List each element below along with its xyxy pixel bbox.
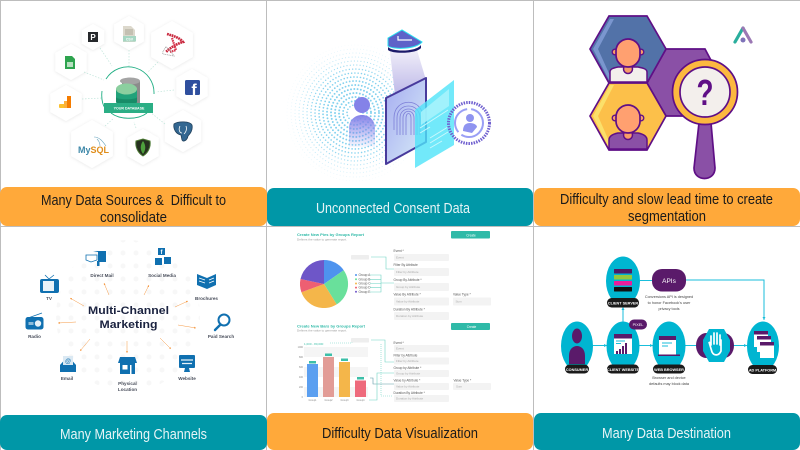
note: conversions API: to honor Facebook's user	[648, 301, 691, 305]
pie legend: Group E	[358, 290, 370, 294]
create button	[451, 231, 490, 238]
heading: multi-channel marketing: Marketing	[100, 319, 158, 331]
icon: Pipedrive	[88, 32, 98, 42]
pie form fields: Sum	[456, 300, 462, 304]
panel: many data sources	[0, 16, 267, 226]
rotating arrows around database	[102, 67, 154, 118]
icon: physical location	[118, 357, 137, 392]
icon: SQL Server	[163, 34, 183, 56]
caption bar: Unconnected Consent Data	[316, 200, 471, 217]
caption bar: segmentation	[628, 208, 706, 225]
icon: MySQL	[78, 137, 110, 155]
caption bar	[267, 413, 533, 450]
pie legend: Group D	[358, 286, 371, 290]
bar form fields: Group by Attribute	[396, 372, 421, 376]
pie report heading: Defines the value to generate report.	[297, 238, 347, 242]
caption bar: Many Data Destination	[602, 425, 731, 442]
bar form fields: Group by Attribute *	[394, 366, 422, 370]
icon: magnifying glass with question mark	[672, 60, 738, 178]
pie form fields: Group by Attribute	[396, 285, 421, 289]
pie report heading: Create New Pies by Groups Report	[297, 233, 365, 237]
orange arrows	[58, 283, 196, 353]
bar form fields: Event	[396, 346, 404, 350]
label: your database	[104, 103, 153, 113]
note: conversions API	[645, 295, 693, 311]
icon: website: Website	[178, 376, 196, 381]
icon: Google Analytics	[59, 96, 71, 108]
pie form fields: Value by Attribute	[396, 300, 420, 304]
pie chart	[300, 260, 348, 308]
create button: Create	[466, 234, 476, 238]
tablet with fingerprint	[386, 78, 426, 164]
pie form fields: Duration by Attribute	[396, 314, 424, 318]
node: web browser	[652, 322, 686, 374]
icon: paid search	[208, 314, 234, 339]
node: client server	[606, 256, 640, 308]
panel: many marketing channels	[0, 240, 267, 450]
bar form fields	[394, 341, 491, 402]
node: client server: CLIENT SERVER	[608, 302, 638, 306]
icon: MongoDB	[136, 139, 150, 156]
node: APIs	[652, 269, 686, 292]
bar chart: Group4	[357, 399, 365, 402]
pie form fields	[394, 249, 491, 320]
caption bar: Difficulty and slow lead time to create	[560, 191, 773, 208]
bar form fields: Event *	[394, 341, 405, 345]
icon: CSV file	[123, 26, 136, 42]
flow arrows	[593, 280, 764, 346]
icon: brochures: Brochures	[195, 296, 218, 301]
logo mark	[735, 28, 751, 42]
bar form fields: Value by Attribute	[396, 384, 420, 388]
bar form fields: Sum	[456, 384, 463, 388]
pie form fields: Duration By Attribute *	[394, 308, 426, 312]
icon: physical location: Location	[118, 387, 137, 392]
label: pixel	[629, 320, 647, 330]
dotted connectors	[82, 48, 174, 128]
panel: unconnected consent data	[267, 30, 533, 226]
icon: CSV file: CSV	[126, 38, 134, 42]
heading: multi-channel marketing: Multi-Channel	[88, 305, 169, 317]
bar chart	[298, 342, 368, 402]
bar report heading	[297, 324, 366, 332]
pie type select	[351, 255, 369, 260]
note: browser defaults: Browser and device	[652, 376, 686, 380]
pie legend: Group B	[358, 277, 370, 281]
icon: shield scanner	[388, 30, 422, 53]
heading: multi-channel marketing	[88, 305, 169, 331]
caption bar	[534, 188, 800, 226]
scanner beam	[390, 50, 426, 95]
hexagon: yellow person	[590, 83, 666, 150]
illustration: data source hexagons	[50, 16, 208, 168]
note: browser defaults: defaults may block data	[649, 382, 690, 386]
dotted background	[56, 240, 200, 392]
icon: Pipedrive: P	[90, 33, 96, 42]
pie report heading	[297, 233, 365, 242]
icon: email: Email	[61, 376, 73, 381]
pie form fields: Filter by Attribute	[396, 270, 419, 274]
bar chart: 1,000 - 80,000	[304, 342, 324, 346]
label: pixel: PIXEL	[633, 323, 643, 327]
node: consumer: CONSUMER	[566, 368, 588, 372]
icon: database cylinder	[116, 78, 140, 104]
node: consumer	[561, 322, 593, 374]
node: ad platform: AD PLATFORM	[749, 368, 776, 372]
icon: PostgreSQL	[174, 122, 192, 141]
bar chart: Group3	[341, 399, 349, 402]
pie legend: Group C	[358, 282, 371, 286]
halftone dot field	[287, 45, 423, 181]
caption bar	[0, 415, 267, 450]
panel: many data destination	[534, 256, 800, 450]
icon: brochures	[195, 274, 218, 301]
pie connectors	[370, 257, 394, 292]
icon: blocking hand	[696, 329, 734, 362]
bar form fields: Filter by Attribute	[394, 354, 418, 358]
icon: Facebook	[185, 80, 200, 99]
caption bar: Many Marketing Channels	[60, 426, 207, 443]
pie form fields: Group By Attribute *	[394, 278, 422, 282]
bar form fields: Value by Attribute *	[394, 378, 421, 382]
icon: website	[178, 355, 196, 381]
panel: data visualization	[267, 231, 533, 450]
pie form fields: Event	[396, 256, 404, 260]
icon: MySQL: MySQL	[78, 145, 110, 155]
caption bar: consolidate	[100, 209, 167, 226]
bar form fields: Duration By Attribute *	[394, 391, 426, 395]
bar chart: 400	[299, 376, 304, 379]
bar chart: 200	[299, 386, 304, 389]
icon: person	[349, 97, 375, 147]
bar report heading: Create New Bars by Groups Report	[297, 324, 366, 328]
hexagon: purple	[647, 49, 723, 116]
create button: Create	[467, 325, 477, 329]
icon: social media: Social Media	[148, 273, 176, 278]
caption bar: Many Data Sources & Difficult to	[41, 192, 226, 209]
bar type select	[351, 338, 369, 342]
bar chart: Group1	[309, 399, 317, 402]
panel: slow segmentation	[534, 16, 800, 226]
pie form fields: Filter By Attribute	[394, 263, 418, 267]
pie form fields: Value Type *	[453, 292, 472, 296]
create button	[451, 323, 490, 330]
icon: TV: TV	[46, 296, 53, 301]
icon: Facebook: f	[191, 82, 197, 99]
label: your database: YOUR DATABASE	[114, 106, 145, 110]
icon: radio: Radio	[28, 334, 41, 339]
pie form fields: Event *	[394, 249, 405, 253]
icon: profile badge	[448, 102, 490, 144]
node: client website	[606, 322, 640, 374]
icon: Google Sheets	[65, 56, 75, 69]
bar chart: Group2	[325, 399, 333, 402]
icon: social media	[148, 248, 176, 278]
note: conversions API: Conversions API is designed	[645, 295, 693, 299]
icon: email	[60, 356, 76, 381]
node: APIs: APIs	[662, 278, 677, 285]
icon: paid search: Paid Search	[208, 334, 234, 339]
icon: radio	[26, 313, 44, 339]
bar form fields: Filter by Attribute	[396, 359, 419, 363]
bar chart: 1000	[298, 346, 304, 349]
note: browser defaults	[649, 376, 690, 386]
bar chart: 0	[302, 396, 304, 399]
hexagon: blue person	[590, 16, 666, 83]
icon: direct mail: Direct Mail	[90, 273, 114, 278]
icon: magnifying glass with question mark: ?	[696, 72, 714, 113]
icon: TV	[40, 275, 59, 301]
pie form fields: Value By Attribute *	[394, 292, 421, 296]
bar chart: 800	[299, 356, 304, 359]
caption bar	[267, 188, 533, 226]
pie legend	[355, 273, 371, 294]
icon: physical location: Physical	[118, 381, 137, 386]
icon: social media: f	[160, 250, 164, 256]
node: web browser: WEB BROWSER	[654, 368, 684, 372]
caption bar	[0, 187, 267, 226]
caption bar	[534, 413, 800, 450]
icon: direct mail	[86, 251, 114, 278]
note: conversions API: privacy tools	[658, 307, 680, 311]
bar form fields: Duration by Attribute	[396, 396, 424, 400]
caption bar: Difficulty Data Visualization	[322, 425, 478, 442]
bar connectors	[330, 340, 394, 400]
bar form fields: Value Type *	[454, 378, 472, 382]
bar report heading: Defines the value to generate report.	[297, 328, 347, 332]
node: client website: CLIENT WEBSITE	[607, 368, 639, 372]
icon: email: @	[65, 359, 71, 365]
node: ad platform	[747, 322, 779, 374]
pie legend: Group A	[358, 273, 371, 277]
bar chart: 600	[299, 366, 304, 369]
translucent document	[415, 80, 454, 168]
